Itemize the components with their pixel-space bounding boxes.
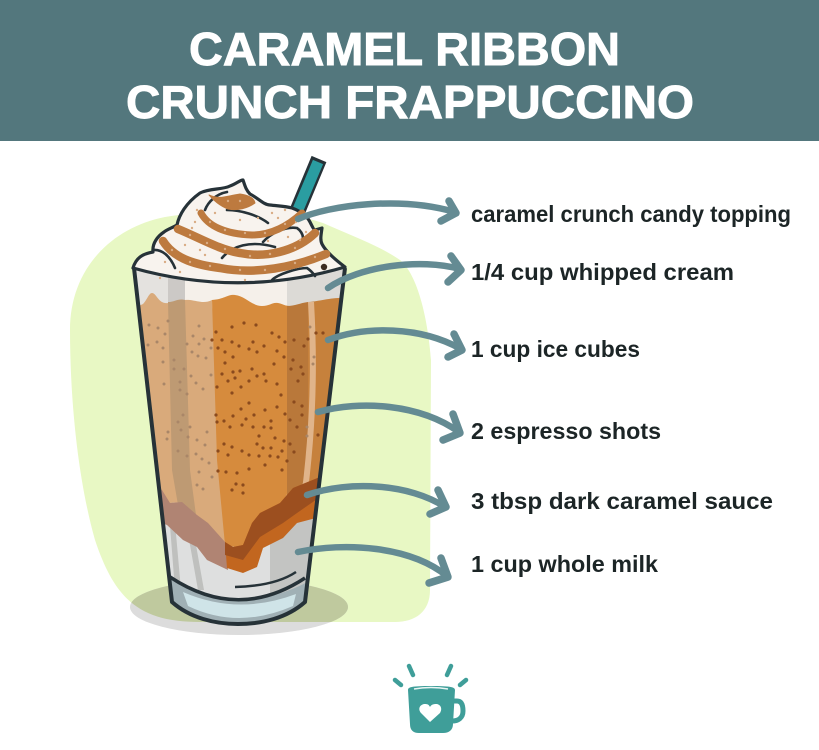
ingredient labels: 1 cup ice cubes	[471, 336, 640, 362]
cream swirl lines	[153, 192, 315, 280]
mug rim	[414, 688, 448, 689]
arrows	[298, 201, 462, 583]
green background blob	[70, 211, 431, 622]
arrow: espresso shots	[318, 406, 460, 440]
heart	[419, 704, 441, 722]
arrow: dark caramel sauce	[307, 486, 446, 514]
coffee specks	[148, 321, 323, 493]
ingredient labels: 3 tbsp dark caramel sauce	[471, 488, 773, 514]
mug handle	[452, 701, 463, 721]
milk layer	[165, 494, 313, 598]
drink illustration	[130, 159, 350, 640]
title: CRUNCH FRAPPUCCINO	[126, 76, 694, 128]
coffee darker stripe left	[168, 299, 196, 515]
caramel left muted	[161, 490, 228, 570]
coffee layer centre	[212, 295, 290, 550]
caramel dark upper	[225, 478, 318, 560]
highlight stripe right	[302, 302, 316, 484]
title	[126, 23, 694, 128]
arrow: caramel crunch candy topping	[298, 201, 456, 221]
whipped cream layer in glass	[136, 269, 343, 306]
glass outline	[134, 268, 345, 624]
header banner	[0, 0, 819, 141]
glass base	[172, 580, 306, 622]
coffee right edge	[308, 298, 340, 482]
coffee layer left	[140, 293, 225, 542]
icon: mug logo	[395, 666, 466, 733]
base curve line	[170, 577, 305, 600]
glass contents	[136, 269, 343, 622]
arrow: whole milk	[298, 547, 448, 583]
icon: straw	[297, 159, 319, 212]
caramel ribbons	[163, 194, 326, 271]
whipped cream	[133, 180, 345, 283]
arrow: ice cubes	[328, 330, 462, 357]
title: CARAMEL RIBBON	[189, 23, 620, 75]
mug rays	[395, 666, 466, 685]
arrow: whipped cream	[328, 256, 461, 288]
cream dark dot	[321, 264, 327, 270]
ingredient labels	[471, 201, 791, 577]
ingredient labels: 2 espresso shots	[471, 418, 661, 444]
ingredient labels: caramel crunch candy topping	[471, 201, 791, 227]
caramel orange lower	[226, 482, 316, 573]
ingredient labels: 1 cup whole milk	[471, 551, 658, 577]
mug body	[408, 686, 455, 733]
ingredient labels: 1/4 cup whipped cream	[471, 259, 734, 285]
caramel crunch specks	[160, 201, 315, 280]
milk highlight line	[235, 572, 296, 587]
glass shadow	[130, 586, 348, 635]
coffee darker stripe right	[287, 302, 308, 495]
